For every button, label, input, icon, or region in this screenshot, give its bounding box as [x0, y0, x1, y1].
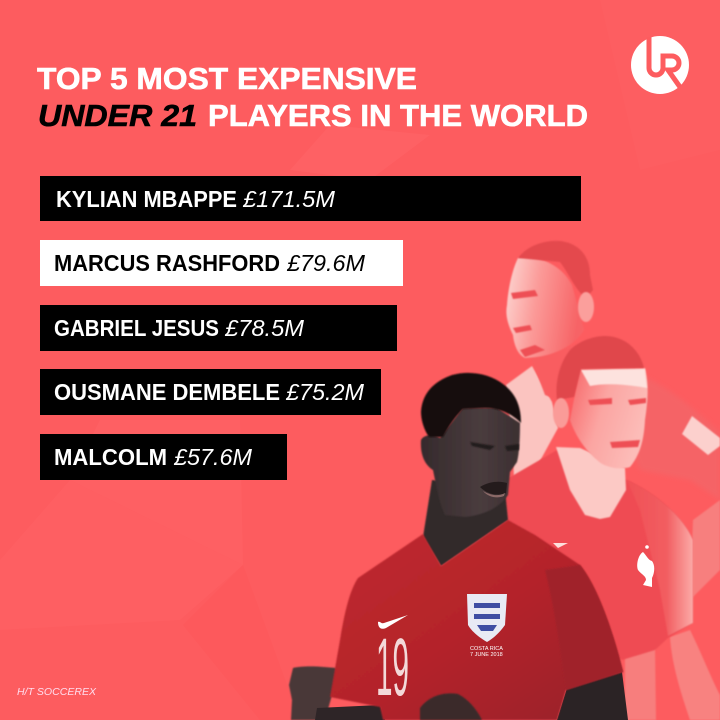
forehead [581, 369, 647, 388]
ranking bar: Ousmane Dembele: OUSMANE DEMBELE [54, 379, 280, 405]
background player: Gabriel Jesus [506, 241, 720, 500]
logo [631, 36, 689, 94]
crest caption: 7 JUNE 2018 [470, 652, 503, 658]
hair [556, 336, 644, 400]
face [421, 408, 520, 517]
ranking bar: Malcolm: MALCOLM [54, 444, 167, 470]
left fist [289, 666, 338, 720]
title: UNDER 21 [38, 99, 197, 133]
ranking bar: Kylian Mbappe: KYLIAN MBAPPE [56, 186, 237, 212]
shirt [500, 450, 693, 660]
ranking bar: Gabriel Jesus: £78.5M [224, 315, 305, 341]
ranking bar: Kylian Mbappe [40, 176, 581, 221]
title [37, 62, 588, 133]
swoosh [378, 615, 408, 629]
ear [578, 292, 594, 322]
face [570, 368, 648, 468]
neck [530, 345, 575, 400]
title: PLAYERS IN THE WORLD [208, 99, 588, 133]
hair [518, 241, 593, 298]
crest [467, 594, 507, 642]
sleeve [627, 480, 693, 636]
credit: H/T SOCCEREX [17, 686, 97, 698]
crest caption: COSTA RICA [470, 646, 503, 652]
mouth [480, 482, 507, 495]
ranking bar: Gabriel Jesus [40, 305, 397, 351]
forearm [315, 705, 385, 720]
ranking bar: Marcus Rashford [40, 240, 403, 286]
ranking bar: Marcus Rashford: £79.6M [286, 250, 366, 276]
ranking bar: Gabriel Jesus: GABRIEL JESUS [54, 315, 219, 341]
ranking bar: Marcus Rashford: MARCUS RASHFORD [54, 250, 280, 276]
background player: Kylian Mbappe [500, 336, 720, 720]
face [506, 257, 584, 358]
ranking bar: Malcolm: £57.6M [173, 444, 253, 470]
brows and eyes [470, 442, 519, 451]
forearm and hand [670, 630, 720, 720]
ranking bar: Ousmane Dembele: £75.2M [285, 379, 365, 405]
armband [682, 416, 720, 455]
crest caption [470, 646, 503, 658]
collar and chest [506, 366, 558, 495]
facial features [588, 398, 646, 448]
foreground player: Marcus Rashford: 19 [376, 622, 409, 713]
shoulder and arm [620, 375, 720, 500]
sleeve shading [545, 565, 623, 690]
neck [423, 480, 508, 566]
ear [553, 398, 569, 428]
shorts [625, 645, 656, 720]
rooster crest [637, 545, 654, 587]
ranking bar: Ousmane Dembele [40, 369, 381, 415]
neck and collar [556, 447, 626, 519]
swoosh [553, 543, 568, 548]
hair [421, 373, 521, 437]
other arm [690, 500, 720, 600]
foreground player: Marcus Rashford [289, 373, 628, 720]
title: TOP 5 MOST EXPENSIVE [37, 62, 417, 96]
facial features [511, 290, 545, 357]
shirt [330, 520, 623, 720]
right arm [557, 672, 628, 720]
ranking bar: Kylian Mbappe: £171.5M [242, 186, 336, 212]
fist [420, 693, 482, 720]
ranking bar: Malcolm [40, 434, 287, 480]
